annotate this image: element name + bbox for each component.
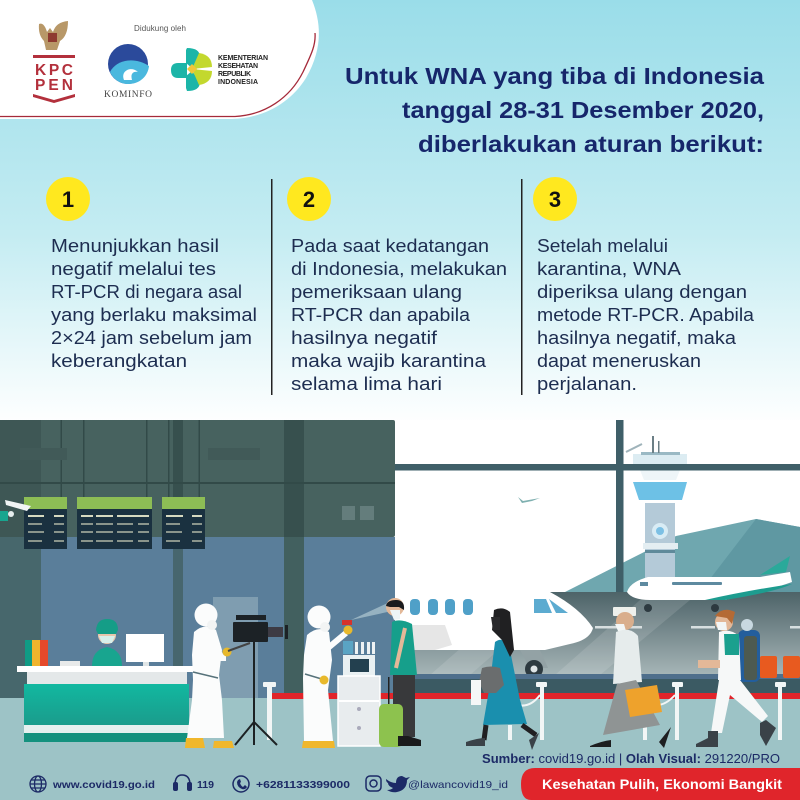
airport illustration [0, 420, 800, 800]
logo: Kementerian Kesehatan: INDONESIA [218, 79, 258, 86]
footer contacts: 119 [197, 779, 214, 791]
window view: sky, tower, mountain, runway [395, 420, 800, 678]
step 2: di Indonesia, melakukan [291, 259, 507, 279]
step 3 [533, 177, 755, 394]
stanchions [263, 682, 786, 740]
step 3: hasilnya negatif, maka [537, 328, 737, 348]
number badge 3 [533, 177, 577, 221]
receptionist [92, 619, 122, 666]
step 2: pemeriksaan ulang [291, 282, 462, 302]
logo: KPCPEN: KPC [35, 62, 73, 79]
step 2: RT-PCR dan apabila [291, 305, 471, 325]
step 3: Setelah melalui [537, 236, 668, 256]
header logo panel [0, 0, 319, 119]
step 1: RT-PCR di negara asal [51, 282, 242, 302]
source credit: Sumber: covid19.go.id | Olah Visual: 291220/PRO [482, 751, 780, 766]
step 2: maka wajib karantina [291, 351, 487, 371]
man in white robe [590, 607, 671, 748]
logo: Kominfo: KOMINFO [104, 90, 152, 100]
icon: twitter [386, 776, 410, 792]
background gradient [0, 0, 800, 425]
step 2: selama lima hari [291, 374, 442, 394]
divider [521, 179, 522, 395]
step 1: Menunjukkan hasil [51, 236, 219, 256]
floor and sill [0, 674, 800, 800]
step 1 [46, 177, 257, 371]
icon: globe [30, 776, 46, 792]
icon: whatsapp [233, 776, 249, 792]
icon: headset [173, 775, 192, 791]
distant plane [518, 497, 540, 503]
supported by label: Didukung oleh [134, 24, 186, 33]
title [345, 63, 764, 157]
step 3: perjalanan. [537, 374, 637, 394]
health worker with thermometer [302, 601, 392, 748]
terminal wall [0, 420, 395, 698]
footer contacts: +6281133399000 [256, 779, 350, 791]
number badge 2: 2 [303, 187, 315, 212]
step 2: hasilnya negatif [291, 328, 438, 348]
control tower [626, 436, 687, 583]
number badge 1 [46, 177, 90, 221]
divider [271, 179, 272, 395]
logo: Kementerian Kesehatan: REPUBLIK [218, 71, 251, 78]
logo: KPCPEN: PEN [35, 77, 73, 94]
icon: instagram [366, 776, 381, 791]
camera on tripod [228, 615, 288, 745]
monitor [126, 634, 164, 667]
step 1: 2×24 jam sebelum jam [51, 328, 252, 348]
step 1: negatif melalui tes [51, 259, 216, 279]
footer contacts [30, 775, 508, 792]
logo: KPCPEN [33, 21, 75, 103]
step 3: karantina, WNA [537, 259, 681, 279]
step 2: Pada saat kedatangan [291, 236, 489, 256]
step 3: metode RT-PCR. Apabila [537, 305, 755, 325]
health worker with camera [185, 604, 234, 748]
orange seats [760, 656, 800, 678]
passenger with suitcase [379, 598, 421, 747]
step 2 [287, 177, 507, 394]
number badge 1: 1 [62, 187, 74, 212]
footer contacts: www.covid19.go.id [52, 779, 155, 791]
reception desk [17, 619, 193, 742]
man with backpack [696, 610, 776, 747]
small plane [627, 556, 792, 612]
security camera [0, 500, 31, 521]
number badge 2 [287, 177, 331, 221]
window frame [395, 420, 800, 592]
title: tanggal 28-31 Desember 2020, [402, 97, 764, 123]
tagline banner: Kesehatan Pulih, Ekonomi Bangkit [542, 776, 782, 792]
logo: Kementerian Kesehatan: KEMENTERIAN [218, 55, 268, 62]
folders [25, 640, 48, 666]
medical cart [338, 641, 380, 746]
title: Untuk WNA yang tiba di Indonesia [345, 63, 764, 89]
flight information boards [24, 497, 205, 549]
title: diberlakukan aturan berikut: [418, 131, 764, 157]
step 1: yang berlaku maksimal [51, 305, 257, 325]
step 3: diperiksa ulang dengan [537, 282, 747, 302]
logo: Kementerian Kesehatan [171, 48, 268, 91]
step 1: keberangkatan [51, 351, 187, 371]
number badge 3: 3 [549, 187, 561, 212]
step 3: dapat meneruskan [537, 351, 701, 371]
large plane [395, 592, 593, 678]
tagline banner [521, 768, 800, 800]
footer contacts: @lawancovid19_id [408, 779, 508, 791]
logo: Kominfo [104, 44, 152, 100]
woman in blue dress [466, 608, 539, 750]
logo: Kementerian Kesehatan: KESEHATAN [218, 63, 258, 70]
